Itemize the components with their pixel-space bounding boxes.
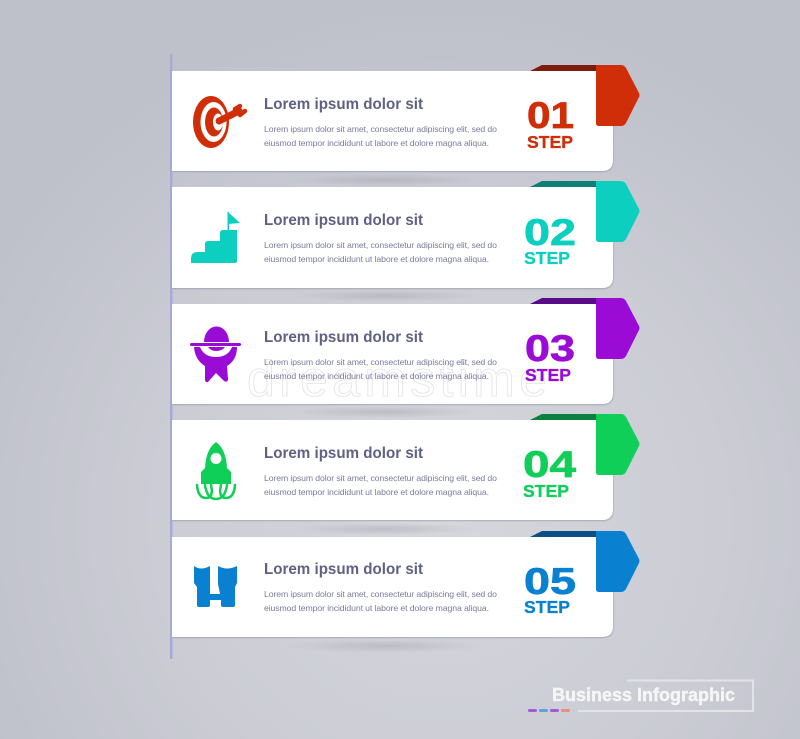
footer frame bbox=[578, 680, 753, 711]
icon: stairs with flag bbox=[191, 212, 240, 263]
icon: person lifting bar bbox=[190, 326, 241, 382]
footer title: Business Infographic bbox=[552, 685, 735, 705]
ribbon fold bbox=[530, 298, 597, 304]
arrow tab bbox=[596, 181, 640, 242]
description: Lorem ipsum dolor sit amet, consectetur adipiscing elit, sed do bbox=[264, 473, 497, 483]
arrow tab bbox=[596, 298, 640, 359]
card bbox=[172, 537, 613, 637]
panel: step 1 bbox=[172, 65, 640, 171]
watermark: dreamstime bbox=[247, 351, 547, 407]
footer colour dashes bbox=[528, 709, 570, 712]
step label: STEP bbox=[523, 481, 569, 501]
ribbon fold bbox=[530, 531, 597, 537]
step number: 03 bbox=[525, 328, 575, 369]
panel: step 4 bbox=[172, 414, 640, 520]
icon: rocket bbox=[197, 442, 235, 499]
panel: step 5 bbox=[172, 531, 640, 637]
card bbox=[172, 71, 613, 171]
description: eiusmod tempor incididunt ut labore et dolore magna aliqua. bbox=[264, 138, 489, 148]
description: eiusmod tempor incididunt ut labore et dolore magna aliqua. bbox=[264, 487, 489, 497]
heading: Lorem ipsum dolor sit bbox=[264, 212, 424, 229]
icon: binoculars bbox=[194, 566, 237, 607]
card bbox=[172, 187, 613, 288]
step number: 04 bbox=[523, 444, 577, 485]
description: Lorem ipsum dolor sit amet, consectetur adipiscing elit, sed do bbox=[264, 357, 497, 367]
heading: Lorem ipsum dolor sit bbox=[264, 561, 424, 578]
step label: STEP bbox=[524, 597, 570, 617]
step label: STEP bbox=[527, 132, 573, 152]
card bbox=[172, 304, 613, 404]
description: eiusmod tempor incididunt ut labore et dolore magna aliqua. bbox=[264, 603, 489, 613]
shadows beneath cards bbox=[285, 174, 485, 653]
step number: 02 bbox=[524, 212, 576, 253]
vertical timeline line bbox=[170, 54, 172, 659]
heading: Lorem ipsum dolor sit bbox=[264, 329, 424, 346]
step label: STEP bbox=[524, 248, 570, 268]
description: Lorem ipsum dolor sit amet, consectetur adipiscing elit, sed do bbox=[264, 240, 497, 250]
description: Lorem ipsum dolor sit amet, consectetur adipiscing elit, sed do bbox=[264, 589, 497, 599]
ribbon fold bbox=[530, 181, 597, 187]
arrow tab bbox=[596, 531, 640, 592]
step label: STEP bbox=[525, 365, 571, 385]
arrow tab bbox=[596, 414, 640, 475]
card bbox=[172, 420, 613, 520]
heading: Lorem ipsum dolor sit bbox=[264, 445, 424, 462]
panel: step 3 bbox=[172, 298, 640, 407]
step number: 01 bbox=[527, 95, 574, 136]
footer badge bbox=[528, 680, 753, 712]
ribbon fold bbox=[530, 414, 597, 420]
panel: step 2 bbox=[172, 181, 640, 288]
icon: target with arrow bbox=[193, 96, 245, 148]
description: Lorem ipsum dolor sit amet, consectetur adipiscing elit, sed do bbox=[264, 124, 497, 134]
step number: 05 bbox=[524, 561, 576, 602]
heading: Lorem ipsum dolor sit bbox=[264, 96, 424, 113]
ribbon fold bbox=[530, 65, 597, 71]
description: eiusmod tempor incididunt ut labore et dolore magna aliqua. bbox=[264, 254, 489, 264]
arrow tab bbox=[596, 65, 640, 126]
description: eiusmod tempor incididunt ut labore et dolore magna aliqua. bbox=[264, 371, 489, 381]
